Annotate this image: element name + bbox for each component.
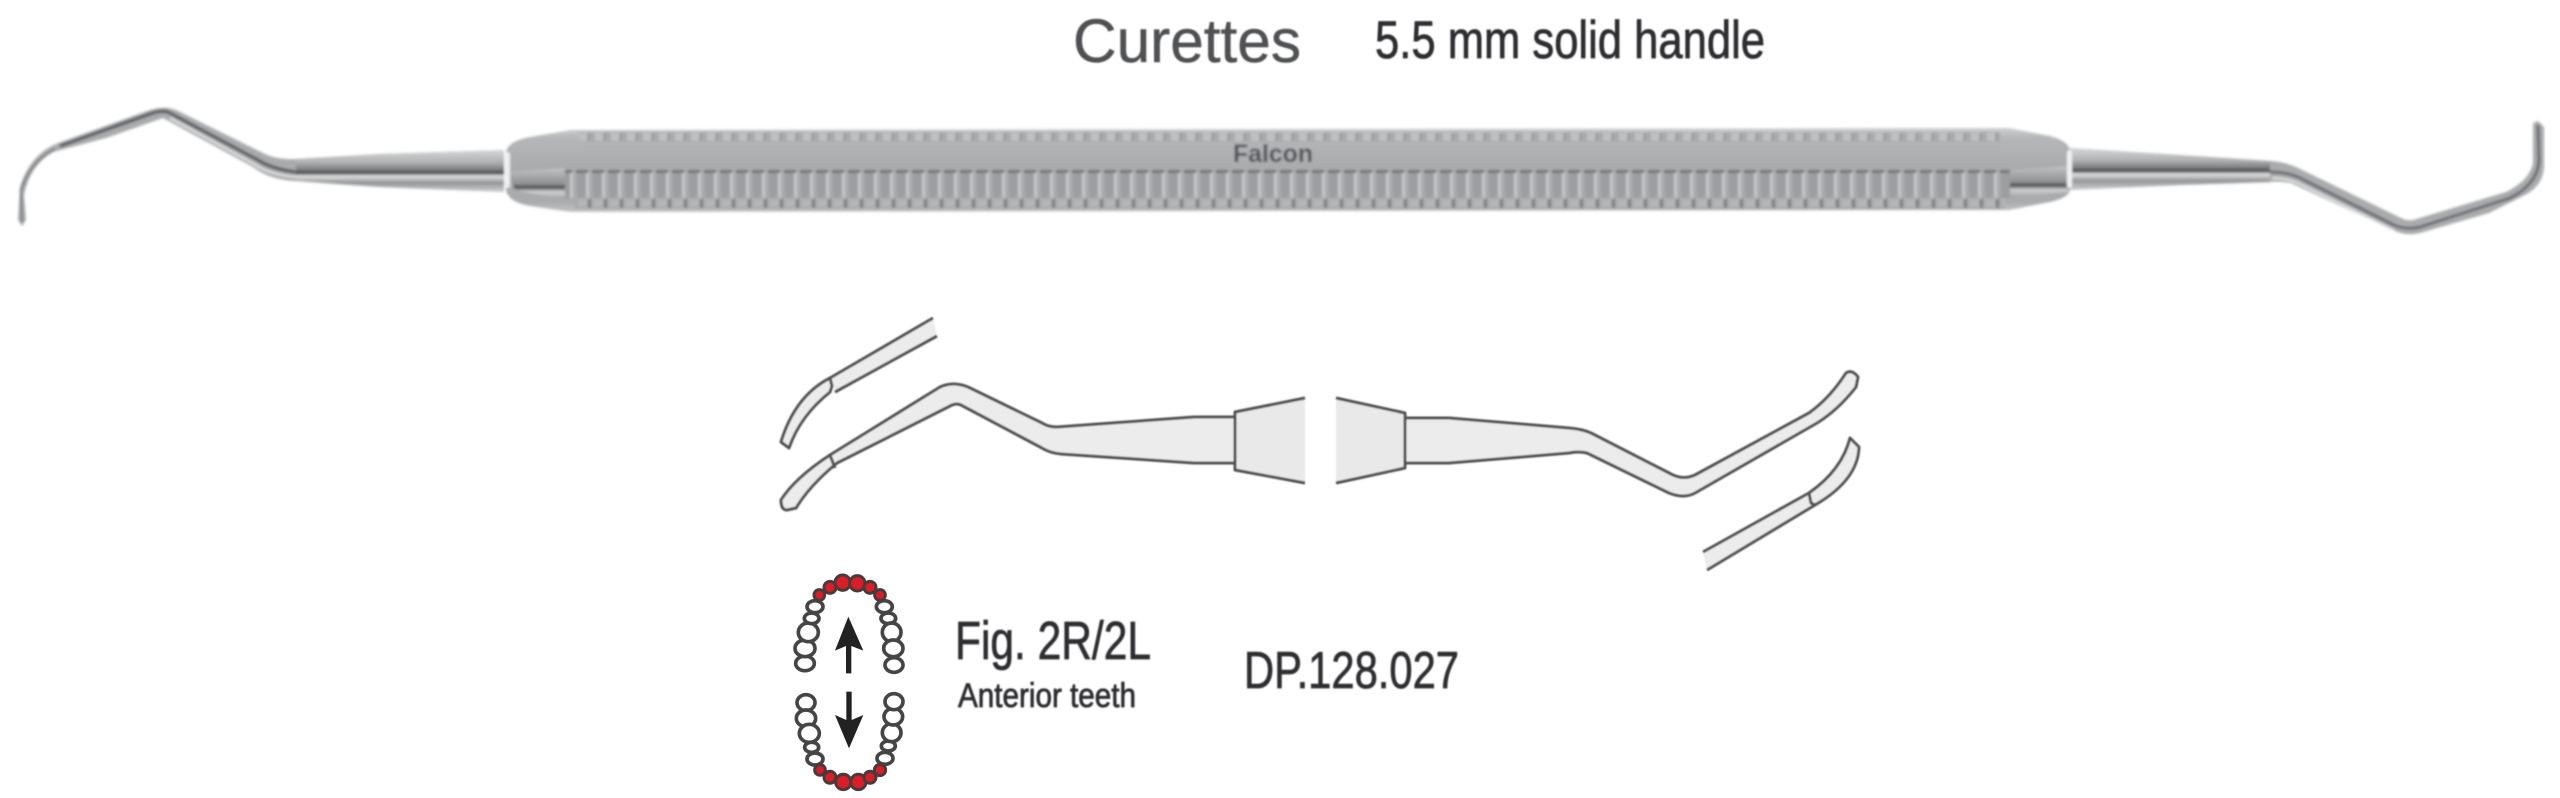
right blade detail: [1703, 438, 1859, 570]
logo: Falcon: Falcon: [1233, 140, 1313, 168]
upper molars and premolars: [795, 601, 903, 672]
left working end: [18, 108, 504, 226]
diagram: instrument line drawing: [781, 318, 1859, 570]
left end facet: [508, 168, 565, 200]
label: figure number: Fig. 2R/2L: [955, 611, 1151, 671]
right working end: [2070, 121, 2544, 234]
bottom knurl row: [575, 198, 2005, 209]
upper anterior teeth: [814, 575, 885, 600]
lower anterior teeth: [815, 764, 886, 790]
grip grooves: [565, 170, 2010, 198]
arrow down: [835, 692, 863, 748]
left working end: [781, 384, 1305, 510]
arrow up: [835, 617, 863, 673]
subtitle: handle size: 5.5 mm solid handle: [1375, 11, 1765, 70]
label: product code: DP.128.027: [1244, 642, 1459, 700]
handle: [505, 128, 2072, 212]
lower molars and premolars: [796, 694, 903, 765]
right working end: [1336, 372, 1858, 496]
left blade detail: [781, 318, 937, 448]
top knurl row: [580, 132, 2000, 142]
label: application: Anterior teeth: [958, 677, 1136, 715]
title: Curettes: Curettes: [1073, 7, 1301, 75]
right end facet: [2010, 166, 2068, 198]
photo: double-ended curette instrument: [18, 108, 2544, 234]
icon: dental arch with anterior teeth highlighted: [795, 575, 903, 790]
